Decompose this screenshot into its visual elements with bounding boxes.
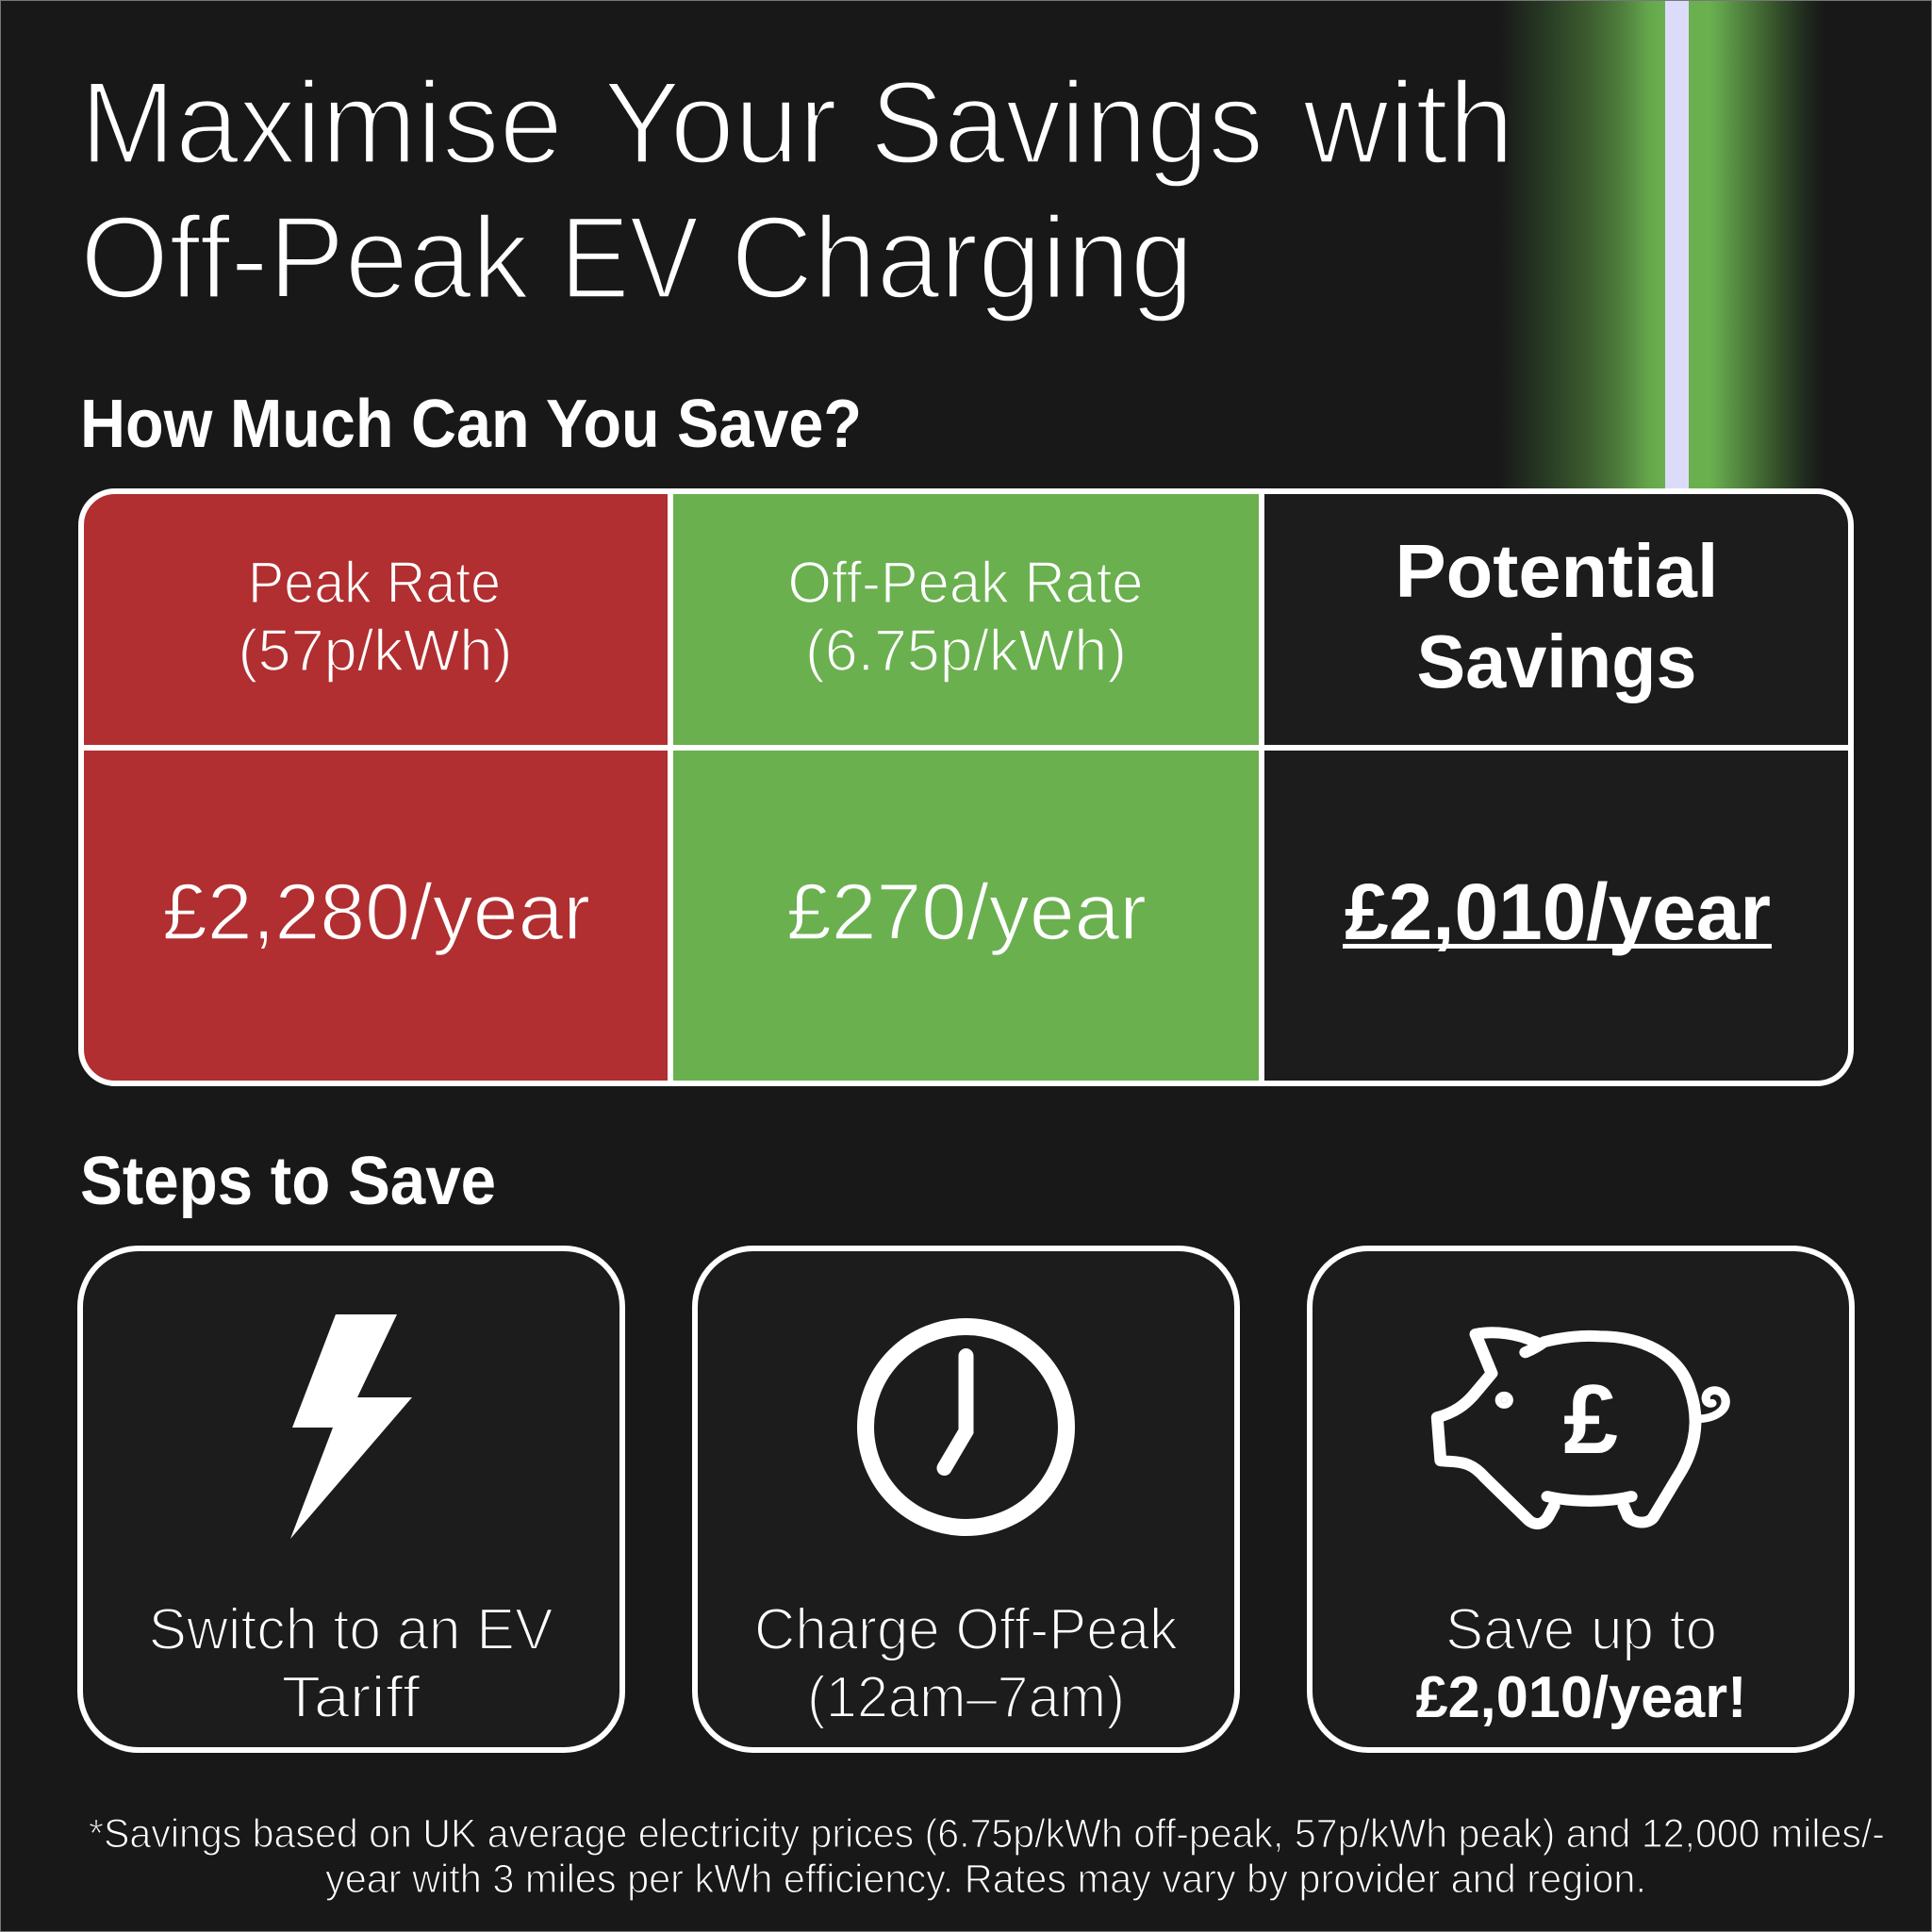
off-peak rate column: £270/year [786, 867, 1147, 956]
icon: clock [866, 1327, 1066, 1527]
step text [754, 1597, 1179, 1730]
step card: save money [1310, 1248, 1852, 1750]
footnote [89, 1811, 1885, 1902]
off-peak rate column: Off-Peak Rate [788, 551, 1143, 616]
peak rate column: Peak Rate [248, 551, 501, 616]
footnote: *Savings based on UK average electricity prices (6.75p/kWh off-peak, 57p/kWh peak) and 12,000 miles/- [89, 1811, 1885, 1857]
heading: how much can you save: How Much Can You Save? [80, 387, 862, 462]
off-peak rate column [670, 491, 1262, 1083]
potential savings column: Potential [1395, 529, 1718, 613]
savings comparison table [79, 490, 1853, 1084]
peak rate column: (57p/kWh) [238, 619, 513, 684]
icon: piggy bank: £ [1563, 1365, 1618, 1475]
step card: charge off-peak [695, 1248, 1237, 1750]
icon: lightning bolt [290, 1314, 412, 1539]
title: with [1302, 58, 1514, 189]
peak rate column: £2,280/year [162, 867, 590, 956]
potential savings column [1343, 529, 1772, 956]
title [80, 58, 1514, 323]
title: Savings [870, 58, 1263, 189]
glowing green light stripe [1499, 0, 1825, 490]
title: Maximise [80, 58, 563, 189]
potential savings column: Savings [1416, 619, 1697, 703]
off-peak rate column: (6.75p/kWh) [805, 619, 1127, 684]
title: EV [560, 193, 699, 323]
title: Your [603, 58, 837, 189]
peak rate column [81, 491, 670, 1083]
potential savings column: £2,010/year [1345, 867, 1771, 956]
step text: Save up to [1445, 1597, 1717, 1662]
step text: Tariff [281, 1665, 421, 1730]
bold savings text: £2,010/year! [1416, 1665, 1746, 1730]
step text: (12am–7am) [807, 1665, 1125, 1730]
step text: Switch to an EV [149, 1597, 553, 1662]
heading: steps to save: Steps to Save [80, 1144, 496, 1219]
step card: switch tariff [80, 1248, 622, 1750]
title: Charging [731, 193, 1194, 323]
step text [149, 1597, 553, 1730]
icon: piggy bank [1437, 1332, 1726, 1524]
title: Off-Peak [80, 193, 530, 323]
footnote: year with 3 miles per kWh efficiency. Rates may vary by provider and region. [325, 1857, 1646, 1902]
step text: Charge Off-Peak [754, 1597, 1179, 1662]
